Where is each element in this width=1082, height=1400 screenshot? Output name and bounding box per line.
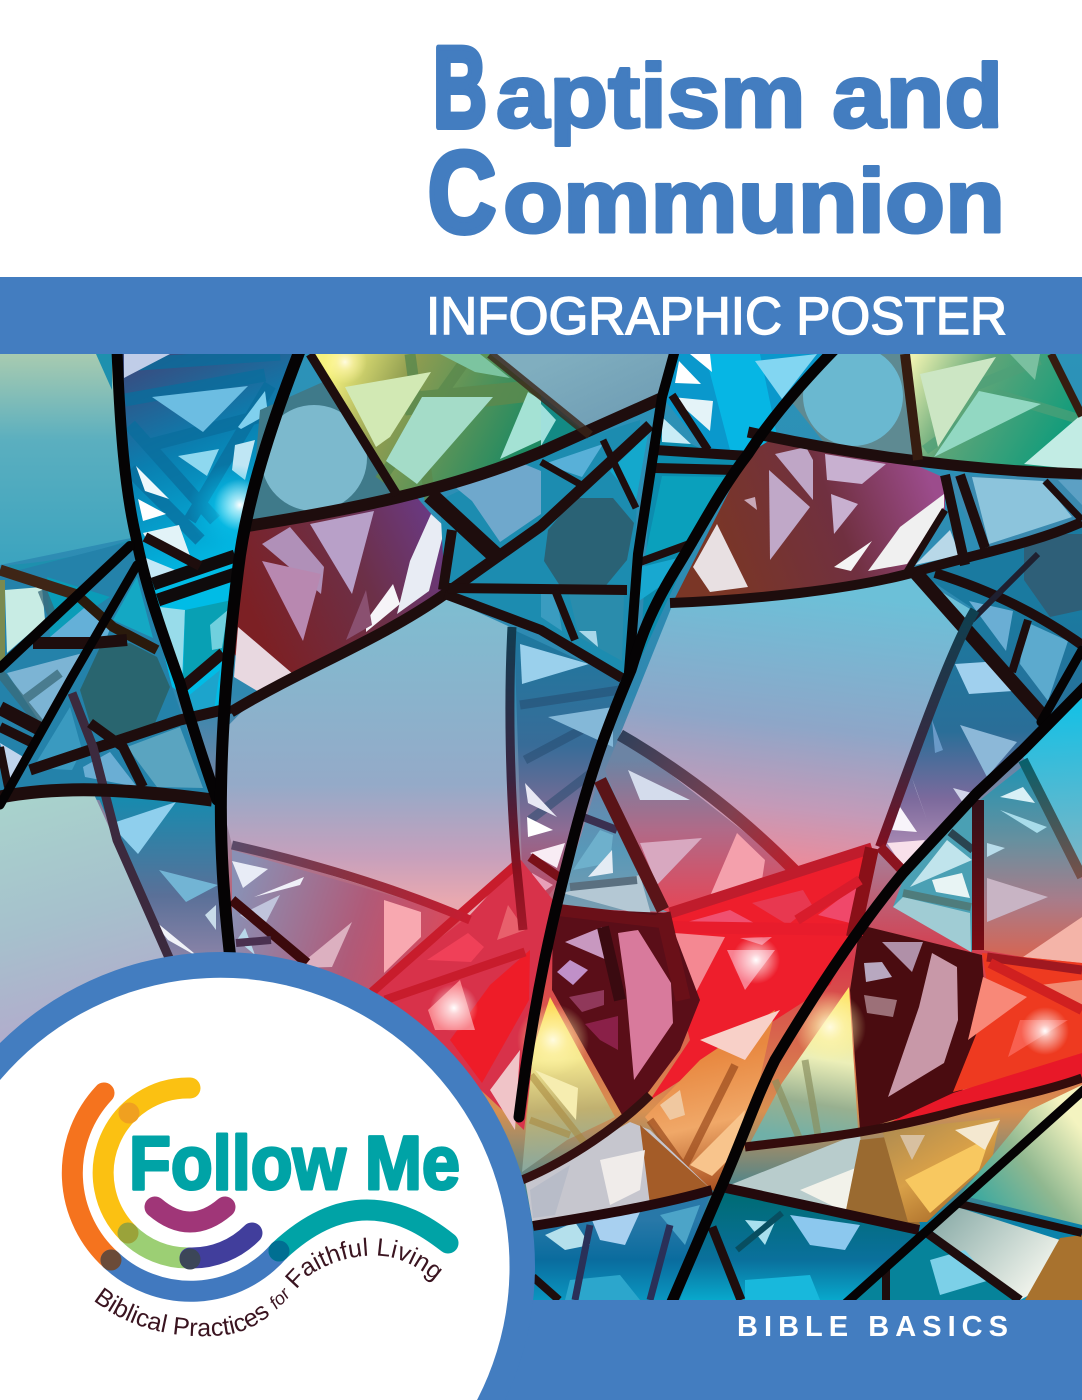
logo: Follow Me xyxy=(62,1078,460,1336)
panel: bottom centre pale glass xyxy=(730,1133,920,1225)
panel: yellow glass left xyxy=(517,997,615,1172)
panel: lower-left slate glass xyxy=(98,796,224,956)
stained glass artwork xyxy=(0,340,1082,1304)
panel: left-lower blue glass xyxy=(0,540,212,800)
panel: bottom left pale glass xyxy=(525,1122,712,1226)
panel: centre-right smooth cell xyxy=(620,576,975,873)
panel: circular cell top right xyxy=(793,354,912,455)
panel: upper-right blue glass xyxy=(915,476,1082,565)
title: ommunion xyxy=(503,152,1005,252)
panel: left mauve glass xyxy=(232,494,445,692)
logo wordmark: Follow Me xyxy=(129,1121,460,1206)
panel: ring glass left of centre cell xyxy=(515,632,620,895)
bottom band xyxy=(400,1300,1082,1400)
subtitle band xyxy=(0,277,1082,354)
panel: left red glass xyxy=(372,860,553,1130)
icon: orange arc xyxy=(72,1093,111,1260)
panel: wine glass centre xyxy=(552,908,700,1122)
panel: red centre glass xyxy=(650,848,872,1100)
panel: circular cell top xyxy=(252,382,390,520)
panel: yellow glass right xyxy=(749,987,866,1145)
title xyxy=(428,24,1005,257)
panel: bottom right green glass xyxy=(960,1085,1082,1225)
panel: yellow-green glass xyxy=(310,354,541,500)
panel: central-left blue glass xyxy=(440,420,648,680)
icon: blue and teal wave xyxy=(111,1210,448,1291)
icon: yellow arc xyxy=(103,1088,190,1233)
panel: dark brown lead lines xyxy=(0,354,1082,1300)
logo tagline: Biblical Practices for Faithful Living xyxy=(94,1238,442,1336)
panel: pale glass under black line xyxy=(893,806,972,952)
panel: black lead lines xyxy=(0,350,1082,1304)
title: B xyxy=(433,24,487,152)
panel: right fading glass xyxy=(980,763,1082,965)
logo badge white circle xyxy=(0,978,510,1400)
panel: bottom teal glass xyxy=(680,1190,925,1300)
panel: slate-pink glass xyxy=(232,850,470,990)
panel: red glowing lead lines xyxy=(530,847,1082,1010)
panel: top middle grey cell xyxy=(490,354,675,452)
panel: lower-left smooth cell xyxy=(0,790,170,1050)
panel: bottom right teal glass xyxy=(850,1238,1020,1300)
panel: pink glass under centre cell xyxy=(605,735,797,913)
panel: centre-left smooth cell xyxy=(221,597,516,918)
icon: overlap dots xyxy=(100,1102,290,1270)
panel: right wine glass xyxy=(850,925,985,1130)
panel: bottom right white glass xyxy=(931,1207,1082,1300)
panel: bottom blue glass xyxy=(533,1190,712,1300)
icon: purple smile xyxy=(155,1207,225,1222)
title: aptism and xyxy=(496,47,1003,147)
icon: indigo arc xyxy=(190,1233,252,1258)
panel: upper-left blue glass xyxy=(117,354,300,721)
panel: right blue glass xyxy=(878,526,1082,875)
bottom band: BIBLE BASICS xyxy=(737,1311,1008,1343)
icon: green arc xyxy=(128,1233,190,1258)
panel: right red glass xyxy=(882,953,1082,1126)
panel: centre mauve glass xyxy=(672,437,945,604)
title: C xyxy=(428,129,496,257)
panel: centre blue glass right of black line xyxy=(640,408,736,660)
panel: top-right green glass xyxy=(905,354,1082,474)
panel: top-left teal cell xyxy=(0,354,136,565)
panel: right cyan cell xyxy=(1023,696,1082,875)
panel: teal strip under cell xyxy=(8,354,131,570)
panel: glass between black line and red lines xyxy=(562,779,668,912)
subtitle band: INFOGRAPHIC POSTER xyxy=(426,287,1007,346)
panel: top cyan glass xyxy=(666,354,822,451)
panel: bottom orange glass xyxy=(882,1118,1000,1222)
panel: orange glass xyxy=(645,1010,780,1192)
icon: sparkles and glows xyxy=(323,340,1069,1055)
logo badge ring xyxy=(0,952,535,1400)
